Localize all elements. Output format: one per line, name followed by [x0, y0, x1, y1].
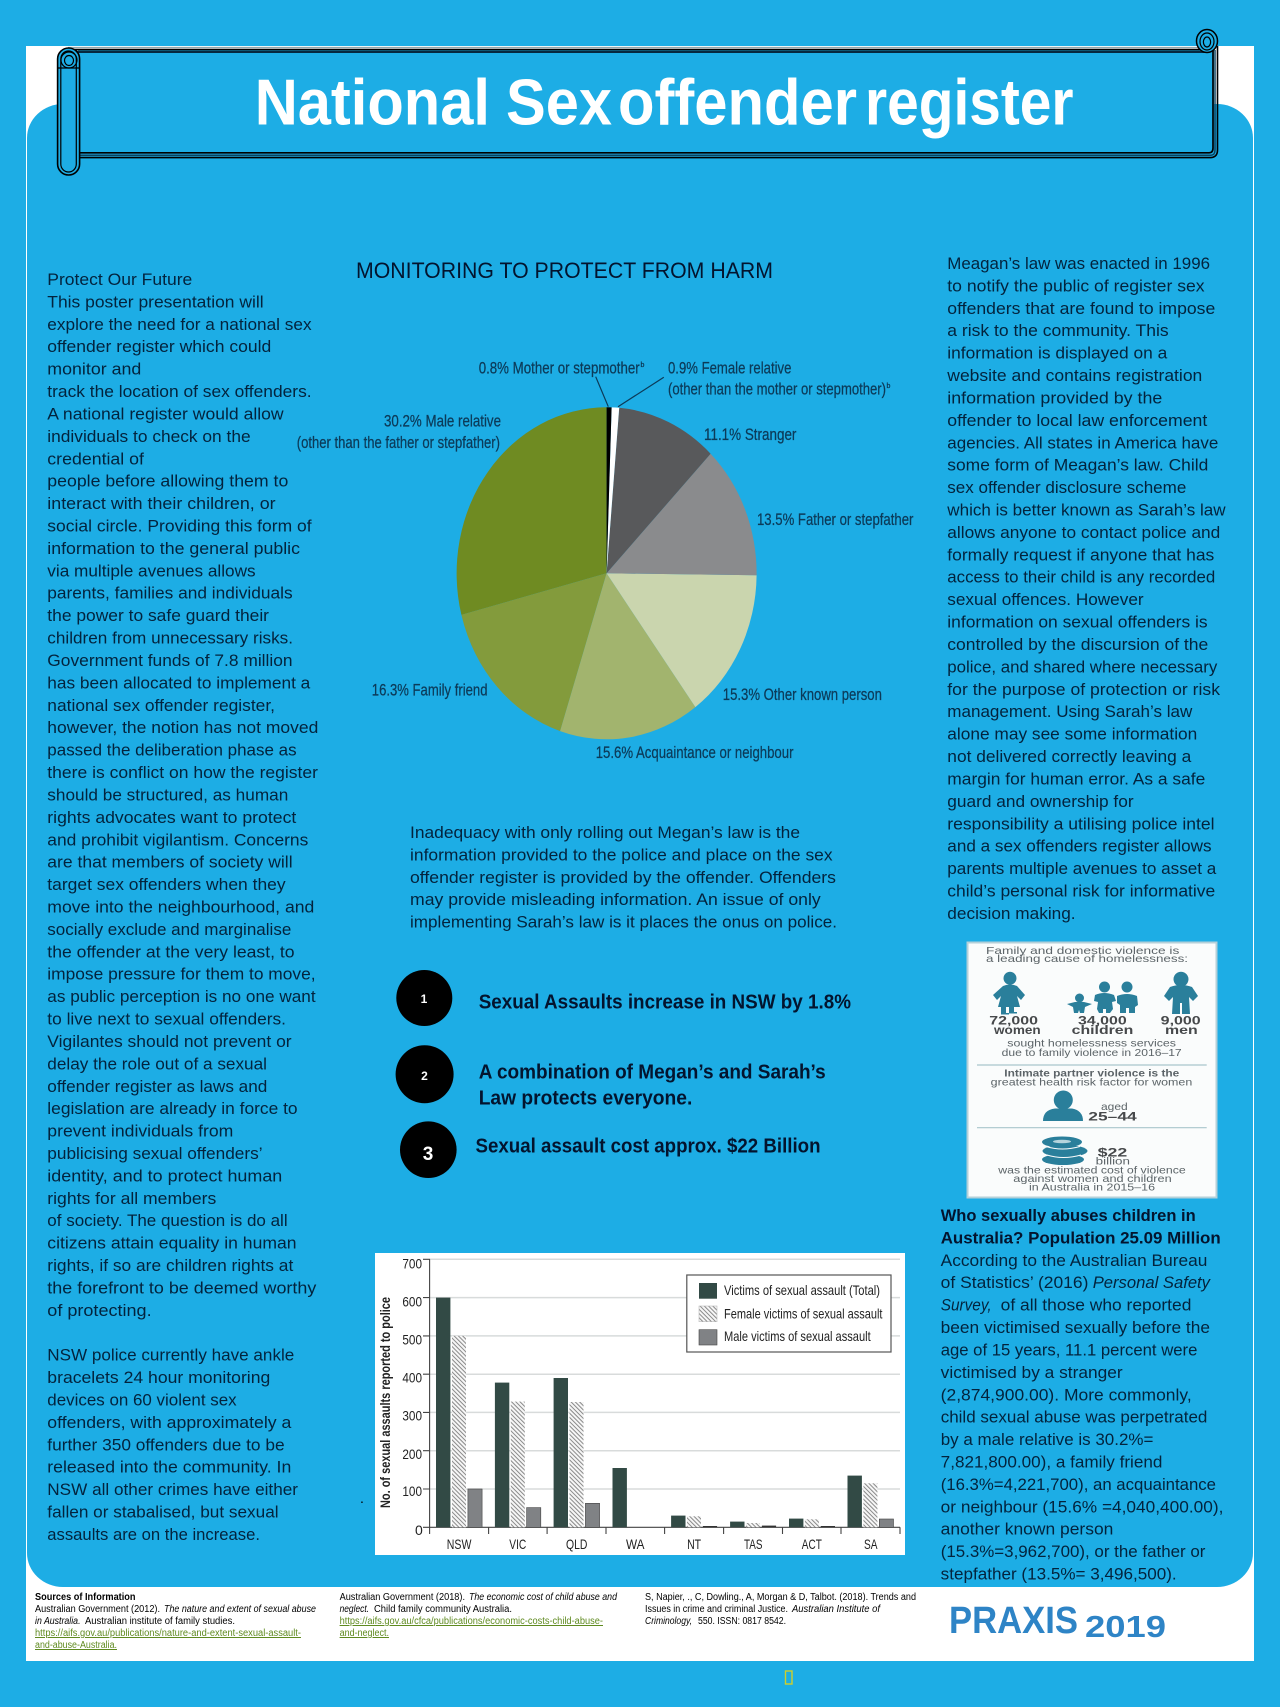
bars: ACT	[789, 1519, 835, 1527]
key point 3: Sexual assault cost approx. $22 Billion	[476, 1136, 820, 1158]
sources column 1: Australian institute of family studies.	[85, 1616, 235, 1627]
left column text: national sex offender register,	[47, 696, 275, 715]
left column text: as public perception is no one want	[47, 987, 316, 1006]
right column text: to notify the public of register sex	[947, 276, 1205, 295]
right column text: margin for human error. As a safe	[947, 769, 1205, 788]
bars: VIC	[495, 1383, 541, 1527]
left column text: move into the neighbourhood, and	[47, 898, 314, 916]
pie chart	[297, 358, 914, 762]
left column text: devices on 60 violent sex	[47, 1390, 237, 1410]
pie chart: 15.3% Other known person	[723, 685, 882, 704]
y axis labels: 0	[415, 1522, 423, 1538]
left column text: the power to safe guard their	[47, 606, 269, 625]
x axis labels: NT	[687, 1536, 701, 1552]
pie chart: 0.9% Female relative	[668, 358, 791, 377]
chart legend: Victims of sexual assault (Total)	[724, 1282, 880, 1298]
sources column 1: Australian Government (2012).	[35, 1604, 160, 1615]
y axis labels: 200	[402, 1446, 422, 1462]
sources column 1: Sources of Information	[35, 1592, 136, 1603]
homelessness infographic: Family and domestic violence is	[986, 945, 1179, 957]
y axis labels: 100	[402, 1483, 422, 1499]
missing glyph box	[786, 1671, 792, 1684]
sources column 1: in Australia.	[35, 1616, 80, 1627]
right column text: police, and shared where necessary	[947, 657, 1218, 676]
right column text: sex offender disclosure scheme	[947, 478, 1186, 497]
lower right text: victimised by a stranger	[941, 1363, 1123, 1382]
left column text: delay the role out of a sexual	[47, 1054, 267, 1073]
right column text: some form of Meagan’s law. Child	[947, 456, 1208, 475]
lower right text: of Statistics’ (2016)	[941, 1273, 1088, 1292]
homelessness infographic: was the estimated cost of violence	[997, 1164, 1186, 1176]
icon: coins	[1042, 1136, 1088, 1165]
lower right text: Survey,	[941, 1296, 992, 1315]
sources column 1: The nature and extent of sexual abuse	[164, 1604, 316, 1615]
left column text: and prohibit vigilantism. Concerns	[47, 830, 308, 849]
y axis labels: 700	[402, 1256, 422, 1272]
lower right text: According to the Australian Bureau	[941, 1251, 1207, 1270]
title: National	[255, 65, 490, 138]
right column text: agencies. All states in America have	[947, 433, 1218, 452]
homelessness infographic: billion	[1096, 1156, 1130, 1168]
left column text: track the location of sex offenders.	[47, 382, 312, 401]
right column text: which is better known as Sarah’s law	[946, 500, 1226, 520]
left column text: offender register which could	[47, 337, 271, 356]
homelessness infographic: due to family violence in 2016–17	[1002, 1047, 1182, 1059]
bars: WA	[612, 1468, 627, 1527]
icon: man	[1164, 972, 1198, 1014]
homelessness infographic: a leading cause of homelessness:	[986, 953, 1188, 965]
left column text: are that members of society will	[47, 853, 293, 872]
left column text: fallen or stabalised, but sexual	[47, 1503, 279, 1522]
pie chart: 30.2% Male relative	[384, 412, 501, 431]
right column text: Meagan’s law was enacted in 1996	[947, 254, 1210, 273]
right column text: decision making.	[947, 904, 1076, 923]
chart legend: Female victims of sexual assault	[724, 1305, 883, 1321]
x axis labels: TAS	[744, 1536, 762, 1552]
title	[255, 65, 1073, 138]
left column text: rights for all members	[47, 1189, 216, 1208]
left column text: A national register would allow	[47, 404, 284, 424]
sources column 3: 550. ISSN: 0817 8542.	[698, 1616, 786, 1627]
left column text: Vigilantes should not prevent or	[47, 1032, 292, 1051]
left column text: individuals to check on the	[47, 427, 251, 446]
left column text: NSW all other crimes have either	[47, 1480, 298, 1499]
key point 2	[396, 1045, 826, 1110]
x axis labels: ACT	[802, 1536, 822, 1552]
left column text: Government funds of 7.8 million	[47, 651, 293, 670]
homelessness infographic: $22	[1098, 1146, 1128, 1160]
pie chart: 16.3% Family friend	[372, 681, 488, 700]
left column text: parents, families and individuals	[47, 584, 293, 603]
lower right text: of all those who reported	[1001, 1296, 1191, 1315]
left column text: interact with their children, or	[47, 494, 276, 513]
homelessness infographic: Intimate partner violence is the	[1004, 1068, 1179, 1080]
left column text: children from unnecessary risks.	[47, 629, 293, 648]
left column text: to live next to sexual offenders.	[47, 1010, 286, 1028]
sources column 2	[340, 1592, 617, 1639]
left column text: offender register as laws and	[47, 1077, 267, 1096]
right column text: responsibility a utilising police intel	[947, 814, 1215, 833]
lower right text	[941, 1206, 1223, 1584]
pie chart: 0.8% Mother or stepmother	[479, 358, 640, 377]
right column text: information provided by the	[947, 388, 1162, 408]
bar chart	[375, 1253, 905, 1555]
left column text: prevent individuals from	[47, 1122, 233, 1141]
left column text: bracelets 24 hour monitoring	[47, 1368, 270, 1387]
x axis labels: NSW	[447, 1536, 472, 1552]
right column text: for the purpose of protection or risk	[947, 680, 1221, 699]
left column text: however, the notion has not moved	[47, 718, 318, 737]
lower right text: by a male relative is 30.2%=	[941, 1430, 1153, 1449]
sources column 2: and-neglect.	[340, 1628, 389, 1639]
right column text: information is displayed on a	[947, 344, 1168, 363]
left column text: further 350 offenders due to be	[47, 1435, 285, 1454]
pie chart: b	[886, 383, 890, 390]
lower right text: (2,874,900.00). More commonly,	[941, 1385, 1192, 1404]
key point 1: 1	[421, 992, 428, 1006]
bars: SA	[848, 1476, 894, 1527]
right column text: management. Using Sarah’s law	[947, 702, 1193, 721]
Praxis 2019 logo: 2019	[1085, 1609, 1166, 1644]
sources column 3: Criminology,	[645, 1616, 692, 1627]
left column text: passed the deliberation phase as	[47, 741, 297, 760]
lower right text: Personal Safety	[1093, 1273, 1211, 1292]
pie chart: 11.1% Stranger	[704, 425, 797, 444]
x axis labels: SA	[864, 1536, 878, 1552]
key point 2: A combination of Megan’s and Sarah’s	[479, 1062, 826, 1084]
left column text: Protect Our Future	[47, 270, 192, 289]
left column text: there is conflict on how the register	[47, 763, 318, 782]
sources column 2: The economic cost of child abuse and	[469, 1592, 617, 1603]
bars: NT	[671, 1516, 717, 1527]
title scroll banner	[58, 30, 1218, 175]
pie chart: (other than the father or stepfather)	[297, 433, 500, 452]
left column text: explore the need for a national sex	[47, 315, 312, 334]
right column text: offender to local law enforcement	[947, 411, 1208, 430]
sources column 1	[35, 1592, 316, 1651]
right column text: sexual offences. However	[947, 590, 1144, 609]
centre paragraph: information provided to the police and place on the sex	[410, 845, 833, 864]
left column text: information to the general public	[47, 539, 301, 558]
left column text: impose pressure for them to move,	[47, 965, 316, 984]
homelessness infographic: sought homelessness services	[1007, 1038, 1176, 1050]
key point 3	[400, 1121, 820, 1178]
homelessness infographic: against women and children	[1013, 1173, 1172, 1185]
homelessness infographic: 34,000	[1078, 1013, 1127, 1027]
left column text: identity, and to protect human	[47, 1166, 282, 1185]
sources column 3	[645, 1592, 916, 1627]
y axis title: No. of sexual assaults reported to police	[377, 1297, 393, 1508]
centre heading: MONITORING TO PROTECT FROM HARM	[356, 258, 773, 283]
right column text: parents multiple avenues to asset a	[947, 859, 1217, 878]
y axis labels: 500	[402, 1332, 422, 1348]
sources column 1: https://aifs.gov.au/publications/nature-and-extent-sexual-assault-	[35, 1628, 301, 1639]
chart legend: Male victims of sexual assault	[724, 1328, 871, 1344]
centre paragraph: may provide misleading information. An issue of only	[410, 890, 821, 909]
right column text: not delivered correctly leaving a	[947, 747, 1192, 766]
left column text: should be structured, as human	[47, 785, 288, 804]
left column text: socially exclude and marginalise	[47, 920, 291, 939]
sources column 2: Australian Government (2018).	[340, 1592, 465, 1603]
homelessness infographic: children	[1072, 1023, 1133, 1037]
left column text: the offender at the very least, to	[47, 942, 295, 961]
x axis labels: VIC	[509, 1536, 526, 1552]
sources column 3: Australian Institute of	[791, 1604, 881, 1615]
right column text: guard and ownership for	[947, 792, 1134, 811]
left column text: This poster presentation will	[47, 292, 264, 311]
left column text: monitor and	[47, 360, 141, 379]
chart legend	[687, 1275, 891, 1352]
key point 1: Sexual Assaults increase in NSW by 1.8%	[479, 992, 851, 1014]
y axis labels: 300	[402, 1408, 422, 1424]
left column text: assaults are on the increase.	[47, 1525, 260, 1544]
lower right text: child sexual abuse was perpetrated	[941, 1408, 1207, 1427]
left column text: offenders, with approximately a	[47, 1413, 292, 1432]
left column text: of society. The question is do all	[47, 1211, 288, 1230]
centre paragraph: implementing Sarah’s law is it places the onus on police.	[410, 913, 837, 932]
left column text: has been allocated to implement a	[47, 673, 311, 692]
homelessness infographic: greatest health risk factor for women	[991, 1076, 1192, 1088]
left column text: rights, if so are children rights at	[47, 1256, 294, 1275]
left column text: released into the community. In	[47, 1458, 291, 1477]
homelessness infographic: 9,000	[1161, 1013, 1201, 1027]
y axis labels: 400	[402, 1369, 422, 1385]
x axis labels: QLD	[566, 1536, 587, 1552]
left column text: via multiple avenues allows	[47, 561, 256, 580]
icon: person bust	[1043, 1090, 1083, 1121]
key point 2: Law protects everyone.	[479, 1088, 692, 1110]
lower right text: age of 15 years, 11.1 percent were	[941, 1340, 1197, 1360]
left column text: rights advocates want to protect	[47, 808, 297, 827]
left column text: publicising sexual offenders’	[47, 1144, 263, 1163]
lower right text: Australia? Population 25.09 Million	[941, 1228, 1221, 1247]
x axis labels: WA	[626, 1536, 645, 1552]
right column text: offenders that are found to impose	[947, 299, 1215, 318]
left column text: of protecting.	[47, 1301, 152, 1320]
pie chart: b	[640, 362, 644, 369]
centre paragraph: offender register is provided by the offender. Offenders	[410, 868, 836, 887]
sources column 3: S, Napier, ., C, Dowling., A, Morgan & D, Talbot. (2018). Trends and	[645, 1592, 916, 1603]
left column text: target sex offenders when they	[47, 875, 286, 894]
stray period: .	[360, 1490, 364, 1506]
homelessness infographic	[968, 942, 1216, 1198]
right column text: formally request if anyone that has	[947, 545, 1214, 564]
Praxis 2019 logo	[949, 1600, 1166, 1644]
lower right text: stepfather (13.5%= 3,496,500).	[941, 1565, 1177, 1584]
y axis labels	[402, 1256, 423, 1538]
homelessness infographic: 72,000	[989, 1013, 1038, 1027]
left column text: the forefront to be deemed worthy	[47, 1278, 317, 1298]
homelessness infographic: aged	[1101, 1101, 1128, 1113]
pie chart: 15.6% Acquaintance or neighbour	[596, 743, 794, 762]
right column text: website and contains registration	[946, 366, 1202, 385]
pie chart: 13.5% Father or stepfather	[757, 510, 914, 529]
left column text: social circle. Providing this form of	[47, 516, 312, 536]
key point 1	[396, 970, 851, 1026]
homelessness infographic: in Australia in 2015–16	[1029, 1182, 1155, 1194]
left column text	[47, 270, 318, 1544]
sources column 2: neglect.	[340, 1604, 369, 1615]
icon: woman	[993, 972, 1025, 1014]
sources column 3: Issues in crime and criminal Justice.	[645, 1604, 788, 1615]
sources column 2: https://aifs.gov.au/cfca/publications/economic-costs-child-abuse-	[340, 1616, 603, 1627]
centre paragraph: Inadequacy with only rolling out Megan’s law is the	[410, 823, 800, 842]
right column text: allows anyone to contact police and	[947, 523, 1220, 542]
title: Sex	[506, 65, 612, 138]
homelessness infographic: men	[1165, 1023, 1198, 1037]
sources column 1: and-abuse-Australia.	[35, 1640, 117, 1651]
right column text: child’s personal risk for informative	[947, 882, 1215, 900]
centre paragraph	[410, 823, 837, 932]
title: register	[865, 65, 1074, 138]
right column text: a risk to the community. This	[947, 321, 1169, 340]
title: offender	[618, 65, 857, 138]
sources column 2: Child family community Australia.	[374, 1604, 512, 1615]
left column text: people before allowing them to	[47, 472, 288, 491]
right column text: alone may see some information	[947, 725, 1197, 744]
lower right text: (16.3%=4,221,700), an acquaintance	[941, 1475, 1216, 1494]
homelessness infographic: 25–44	[1088, 1110, 1137, 1124]
y axis labels: 600	[402, 1294, 422, 1310]
right column text: access to their child is any recorded	[947, 568, 1215, 587]
right column text: controlled by the discursion of the	[947, 635, 1208, 654]
x axis labels	[447, 1536, 878, 1552]
bars: TAS	[730, 1522, 776, 1527]
lower right text: or neighbour (15.6% =4,040,400.00),	[941, 1497, 1223, 1516]
homelessness infographic: women	[993, 1023, 1041, 1037]
bars: NSW	[436, 1298, 482, 1527]
right column text: and a sex offenders register allows	[947, 837, 1212, 856]
Praxis 2019 logo: PRAXIS	[949, 1600, 1078, 1642]
left column text: credential of	[47, 449, 144, 468]
key point 3: 3	[423, 1144, 433, 1165]
icon: children	[1067, 982, 1138, 1013]
lower right text: 7,821,800.00), a family friend	[941, 1452, 1162, 1472]
lower right text: (15.3%=3,962,700), or the father or	[941, 1542, 1206, 1561]
key point 2: 2	[421, 1069, 428, 1083]
pie chart: (other than the mother or stepmother)	[668, 379, 886, 398]
right column text: information on sexual offenders is	[947, 613, 1208, 632]
left column text: NSW police currently have ankle	[47, 1346, 294, 1365]
left column text: legislation are already in force to	[47, 1099, 298, 1118]
right column text	[946, 254, 1226, 923]
lower right text: been victimised sexually before the	[941, 1318, 1210, 1337]
bars: QLD	[554, 1378, 600, 1527]
lower right text: Who sexually abuses children in	[941, 1206, 1196, 1225]
lower right text: another known person	[941, 1520, 1113, 1539]
left column text: citizens attain equality in human	[47, 1234, 297, 1253]
